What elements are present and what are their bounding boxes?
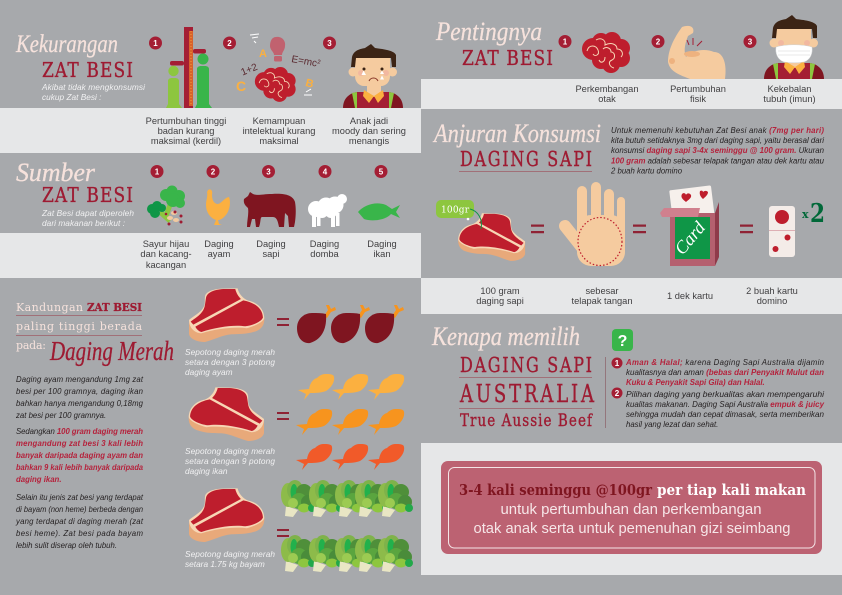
caption: moody: moody dan sering xyxy=(332,126,406,136)
comparison: steak vs fish: daging ikan xyxy=(185,466,228,476)
number badges xyxy=(149,36,336,50)
caption: pertumbuhan xyxy=(146,116,226,146)
icon: height ruler with two children xyxy=(166,27,212,108)
number badges: 3 xyxy=(327,39,332,48)
icon: question mark: ? xyxy=(618,333,627,350)
icon: brain with formulas: 1+2 xyxy=(239,62,260,78)
icon: brain xyxy=(582,32,630,73)
icon: brain with formulas: 2 xyxy=(317,60,322,66)
heading: daging merah: Daging Merah xyxy=(49,336,174,366)
text block: paragraph 2: bahkan 9 kali lebih banyak daripada xyxy=(16,463,144,472)
captions: tubuh (imun) xyxy=(763,94,816,104)
captions: fisik xyxy=(690,94,706,104)
heading: kandungan: pada: xyxy=(16,339,46,352)
icon: question mark xyxy=(612,329,633,351)
equals sign xyxy=(633,224,646,233)
caption: kemampuan: intelektual kurang xyxy=(243,126,315,136)
reason 2: Pilihan daging yang berkualitas akan mempengaruhi xyxy=(626,390,824,399)
caption: pertumbuhan: Pertumbuhan tinggi xyxy=(146,116,226,126)
text block: paragraph 2: Sedangkan 100 gram daging merah xyxy=(16,427,143,436)
reason 2: 2 xyxy=(615,389,620,398)
heading: daging sapi: DAGING SAPI xyxy=(460,148,592,172)
icon: flexed arm xyxy=(668,26,726,79)
comparison: steak vs chicken: daging ayam xyxy=(185,367,233,377)
number badges: 1 xyxy=(153,39,158,48)
subtitle xyxy=(41,208,134,228)
comparison: steak vs spinach: Sepotong daging merah xyxy=(185,549,275,559)
icon: brain with formulas xyxy=(236,34,322,102)
icon: cow xyxy=(244,192,296,227)
text block: paragraph 3: di bayam (non heme) berbeda dengan xyxy=(16,505,143,514)
reason 2: hasil yang lezat dan sehat. xyxy=(626,420,718,429)
icon: steak with 100gr tag xyxy=(436,200,525,261)
text block: recommendation: kita butuh setidaknya 3mg dari daging sapi, yaitu berasal dari xyxy=(611,136,824,145)
text block: recommendation: konsumsi daging sapi 3-4x seminggu @ 100 gram. Ukuran xyxy=(611,146,824,155)
captions: Sayur hijau xyxy=(143,239,189,249)
text block: paragraph 1: bahkan hanya mengandung 0,18mg xyxy=(16,399,144,408)
icon: steak with 100gr tag: 100gr xyxy=(441,206,470,216)
text block: recommendation: 2 buah kartu domino xyxy=(610,166,683,176)
number badges: 2 xyxy=(227,39,232,48)
captions: Daging xyxy=(367,239,397,249)
captions xyxy=(476,286,798,306)
number badges: 4 xyxy=(323,168,328,176)
icon: boy with mask xyxy=(764,15,824,79)
heading: kandungan: ZAT BESI xyxy=(87,301,142,314)
captions: telapak tangan xyxy=(572,296,632,306)
captions: Perkembangan xyxy=(575,84,639,94)
text block: paragraph 2 xyxy=(16,427,144,484)
caption: moody: menangis xyxy=(349,136,390,146)
text block: paragraph 3: yang terdapat di daging merah (zat xyxy=(15,517,144,526)
subtitle: dari makanan berikut : xyxy=(42,218,125,228)
captions: otak xyxy=(598,94,616,104)
icon: sheep xyxy=(308,194,347,227)
icon: crying boy xyxy=(343,44,403,108)
heading: kenapa memilih: Kenapa memilih xyxy=(431,322,580,351)
heading: kandungan xyxy=(16,301,142,352)
captions xyxy=(575,84,816,104)
reason 1 xyxy=(612,358,824,387)
heading: kandungan: paling tinggi berada xyxy=(16,320,142,333)
number badges: 2 xyxy=(211,168,216,176)
comparison: steak vs chicken xyxy=(185,288,404,377)
callout text: untuk pertumbuhan dan perkembangan xyxy=(500,502,762,518)
number badges: 2 xyxy=(656,38,661,46)
captions: ikan xyxy=(373,249,391,259)
comparison: steak vs fish: setara dengan 9 potong xyxy=(185,456,275,466)
subtitle: cukup Zat Besi : xyxy=(42,92,102,102)
captions: dan kacang- xyxy=(140,249,192,259)
caption: pertumbuhan: maksimal (kerdil) xyxy=(151,136,221,146)
captions: domba xyxy=(310,249,340,259)
reason 2 xyxy=(612,388,825,429)
comparison: steak vs chicken: setara dengan 3 potong xyxy=(185,357,275,367)
caption: kemampuan xyxy=(243,116,315,146)
heading: daging sapi australia: DAGING SAPI xyxy=(460,354,592,378)
icon: deck of cards: Card xyxy=(670,217,710,258)
captions: sebesar xyxy=(585,286,619,296)
text block: paragraph 2: daging ikan. xyxy=(16,475,62,484)
panel: pentingnya zat besi xyxy=(435,15,824,104)
text block: paragraph 2: mengandung zat besi 3 kali lebih xyxy=(16,439,143,448)
text block: paragraph 3: besi heme). Zat besi pada bayam xyxy=(16,529,144,538)
number badges: 5 xyxy=(379,168,384,176)
reason 2: sehingga mudah dan cepat dimasak, serta memberikan xyxy=(626,410,824,419)
reason 1: Kuku & Penyakit Sapi Gila) dan Halal. xyxy=(626,378,765,387)
number badges: 1 xyxy=(563,38,568,46)
light band: anjuran captions xyxy=(421,278,842,314)
panel: kekurangan zat besi xyxy=(15,27,406,146)
captions: Daging xyxy=(310,239,339,249)
captions: Pertumbuhan xyxy=(670,84,726,94)
subtitle: Akibat tidak mengkonsumsi xyxy=(41,82,146,92)
icon: brain with formulas: E=mc xyxy=(290,54,318,69)
text block: recommendation xyxy=(610,126,825,176)
captions: Daging xyxy=(204,239,234,249)
caption: kemampuan: maksimal xyxy=(259,136,299,146)
reason 1: Aman & Halal; karena Daging Sapi Australia dijamin xyxy=(625,358,824,367)
comparison: steak vs spinach: setara 1.75 kg bayam xyxy=(185,559,265,569)
caption: kemampuan: Kemampuan xyxy=(253,116,305,126)
icon: deck of cards xyxy=(660,185,719,266)
heading: kekurangan: Kekurangan xyxy=(15,31,118,58)
callout headline xyxy=(459,481,806,499)
captions: sapi xyxy=(262,249,280,259)
heading: zat besi: ZAT BESI xyxy=(462,48,553,70)
number badges: 1 xyxy=(155,168,160,176)
captions: daging sapi xyxy=(476,296,524,306)
captions: ayam xyxy=(208,249,231,259)
caption: moody: Anak jadi xyxy=(350,116,388,126)
text block: paragraph 2: banyak daripada daging ayam dan xyxy=(16,451,143,460)
captions: Daging xyxy=(256,239,286,249)
captions: 1 dek kartu xyxy=(667,291,713,301)
captions: 100 gram xyxy=(480,286,520,296)
light band: sumber captions xyxy=(0,233,421,278)
number badges xyxy=(150,165,388,178)
icon: domino x2 xyxy=(769,199,825,257)
number badges: 3 xyxy=(266,168,271,176)
icon: brain with formulas: A xyxy=(259,48,267,60)
icon: hand xyxy=(565,182,625,266)
heading: daging sapi australia: True Aussie Beef xyxy=(460,410,593,430)
caption: moody xyxy=(332,116,406,146)
equals sign xyxy=(740,224,753,233)
heading: daging sapi australia: AUSTRALIA xyxy=(459,379,595,408)
captions xyxy=(140,239,397,270)
captions: 2 buah kartu xyxy=(746,286,798,296)
subtitle: Zat Besi dapat diperoleh xyxy=(41,208,134,218)
text block: paragraph 1: besi per 100 gramnya, daging ikan xyxy=(16,387,143,396)
heading: sumber: Sumber xyxy=(16,158,96,187)
callout text: otak anak serta untuk pemenuhan gizi seimbang xyxy=(474,521,790,537)
text block: recommendation: 100 gram adalah sebesar telapak tangan atau dek kartu atau xyxy=(611,156,825,166)
text block: recommendation: Untuk memenuhi kebutuhan Zat Besi anak (7mg per hari) xyxy=(611,126,824,135)
callout headline: per tiap kali makan xyxy=(657,481,806,499)
panel: kenapa memilih xyxy=(431,322,825,430)
light band: pentingnya captions xyxy=(421,79,842,109)
captions: domino xyxy=(757,296,787,306)
equals sign xyxy=(531,224,544,233)
text block: paragraph 1: Daging ayam mengandung 1mg zat xyxy=(16,375,144,384)
panel: kandungan zat besi xyxy=(15,288,413,572)
comparison: steak vs chicken: Sepotong daging merah xyxy=(185,347,275,357)
icon: brain with formulas: B xyxy=(304,77,315,91)
panel: anjuran konsumsi xyxy=(432,119,825,306)
number badges xyxy=(558,35,756,48)
comparison: steak vs fish xyxy=(185,374,404,476)
text block: paragraph 3: Selain itu jenis zat besi yang terdapat xyxy=(16,493,144,502)
text block: paragraph 3: lebih sulit diserap oleh tubuh. xyxy=(16,541,117,550)
text block: paragraph 3 xyxy=(15,493,144,550)
heading: anjuran konsumsi: Anjuran Konsumsi xyxy=(432,119,601,148)
light band: kekurangan captions xyxy=(0,108,421,153)
icon: brain with formulas: C xyxy=(236,78,246,94)
comparison: steak vs spinach xyxy=(185,480,413,572)
reason 2: kualitas makanan. Daging Sapi Australia empuk & juicy xyxy=(626,400,825,409)
icon: domino x2: 2 xyxy=(810,199,825,229)
light band: bottom callout background xyxy=(421,443,842,575)
captions: kacangan xyxy=(146,260,186,270)
reason 1: 1 xyxy=(615,359,620,368)
panel: sumber zat besi xyxy=(16,158,400,270)
comparison: steak vs fish: Sepotong daging merah xyxy=(185,446,275,456)
icon: domino x2: x xyxy=(802,208,809,221)
reason 1: kualitasnya dan aman (bebas dari Penyakit Mulut dan xyxy=(626,368,824,377)
captions: Kekebalan xyxy=(768,84,811,94)
icon: chicken xyxy=(206,189,230,225)
callout text xyxy=(474,502,790,537)
heading: pentingnya: Pentingnya xyxy=(435,17,542,46)
number badges: 3 xyxy=(748,38,753,46)
text block: paragraph 1 xyxy=(15,375,144,420)
heading: zat besi: ZAT BESI xyxy=(42,185,133,207)
subtitle xyxy=(41,82,146,102)
icon: fish xyxy=(358,203,400,220)
heading: zat besi: ZAT BESI xyxy=(42,60,133,82)
callout: recommendation xyxy=(441,461,822,554)
icon: broccoli and beans xyxy=(147,186,185,226)
heading: daging sapi australia xyxy=(459,354,595,430)
caption: pertumbuhan: badan kurang xyxy=(158,126,214,136)
text block: paragraph 1: zat besi per 100 gramnya. xyxy=(15,411,106,420)
heading: kandungan: Kandungan xyxy=(16,301,83,314)
callout headline: 3-4 kali seminggu @100gr xyxy=(459,481,653,499)
